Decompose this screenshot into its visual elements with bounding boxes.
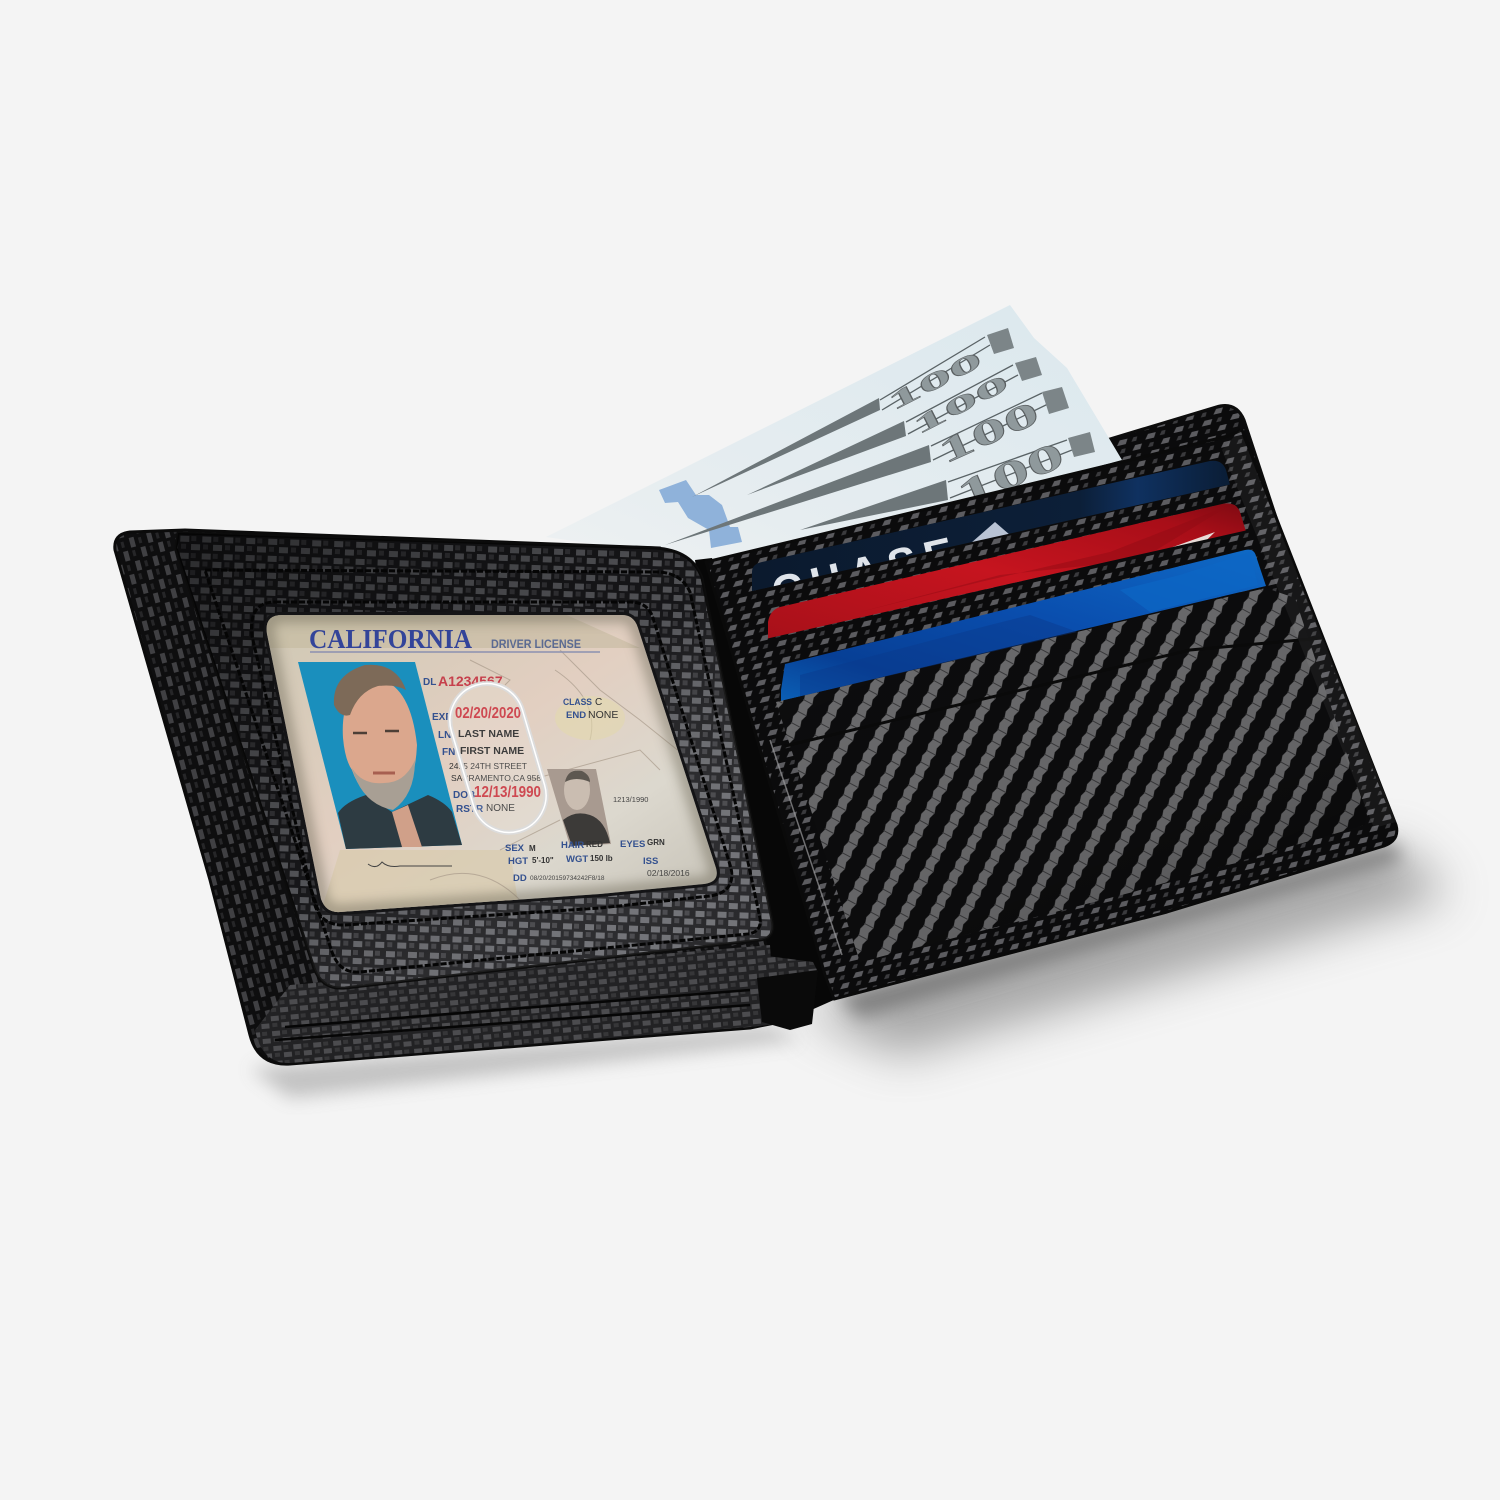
blue card [781,550,1266,701]
bill 4 engraving [800,432,1095,530]
hologram oval [447,681,548,835]
licence fields: EXP [432,712,452,723]
licence fields: FN [442,747,455,758]
pocket 2 strip [752,530,1270,704]
left wallet panel [115,530,818,1064]
licence fields: HGT [508,856,528,867]
lower pocket stitching [275,990,750,1040]
pocket seam [785,638,1322,746]
licence type: DRIVER LICENSE [491,639,581,651]
licence fields: CLASS [563,697,592,708]
bill 3 engraving [665,387,1069,545]
licence fields: FIRST NAME [460,745,524,757]
wallet back panel top [1090,406,1290,560]
licence fields: DOB [453,790,475,801]
licence fields [423,673,690,884]
navy card: CHASE [767,528,959,618]
red card [768,503,1248,650]
licence fields: WGT [566,854,588,865]
ground shadow [250,842,1450,1098]
licence card [267,615,717,912]
driver licence [264,612,717,915]
outer leather [115,530,790,1064]
map lines [430,650,690,900]
state name: CALIFORNIA [309,624,472,654]
bill 4 engraving: 100 [951,434,1071,516]
main card pocket stripes [776,588,1367,962]
pocket 1 strip [730,484,1250,650]
licence fields: EYES [620,839,645,850]
left frame highlight [770,740,842,955]
licence fields: LAST NAME [458,728,519,740]
bill paper stack [546,305,1122,570]
licence fields: 02/20/2020 [455,705,521,722]
flap outer stitching [205,570,760,972]
blue security band [659,480,742,548]
photo [298,662,462,849]
licence fields: ISS [643,856,658,867]
licence fields: RSTR [456,804,484,815]
licence fields: RED [586,840,603,849]
window edge [267,615,717,912]
licence fields: SACRAMENTO,CA 958 [451,773,541,783]
fold gap between panels [695,558,845,1015]
licence fields: 5'-10" [532,856,554,865]
licence fields: C [595,697,602,708]
ghost photo [547,769,611,846]
licence fields: SEX [505,843,525,854]
licence fields: M [529,844,536,853]
navy card [752,460,1230,591]
licence fields: END [566,710,586,721]
lower pocket [255,945,775,1063]
right wallet panel [706,430,1397,999]
window vignette [267,615,717,912]
licence fields: 2415 24TH STREET [449,761,527,771]
licence fields: GRN [647,838,665,847]
licence fields: LN [438,730,451,741]
bill 1 engraving: 100 [884,347,987,416]
spine [757,970,818,1030]
bill 1 engraving [692,328,1014,497]
bill 3 engraving: 100 [933,394,1045,471]
licence fields: A1234567 [438,673,503,689]
flap inner stitching [251,602,732,925]
licence header bar [310,651,600,653]
licence fields: 02/18/2016 [647,868,690,878]
right frame gloss [1222,430,1396,828]
bill 2 engraving [747,357,1042,495]
licence fields: HAIR [561,840,584,851]
id flap [176,533,773,988]
lower flap sliver [745,953,818,980]
signature [368,862,452,867]
licence fields: 08/20/20159734242F8/18 [530,875,605,882]
bill 2 engraving: 100 [909,370,1013,440]
licence fields: NONE [588,709,618,721]
banknotes [546,305,1122,570]
licence fields: DL [423,677,436,688]
licence fields: 12/13/1990 [474,784,541,801]
licence fields: 1213/1990 [613,795,648,804]
licence fields: 150 lb [590,854,613,863]
bottom tan band [320,850,520,915]
panel base [706,430,1397,999]
licence fields: NONE [486,803,515,814]
licence fields: DD [513,873,527,884]
top tan band [264,612,640,648]
wallet illustration [113,305,1458,1106]
